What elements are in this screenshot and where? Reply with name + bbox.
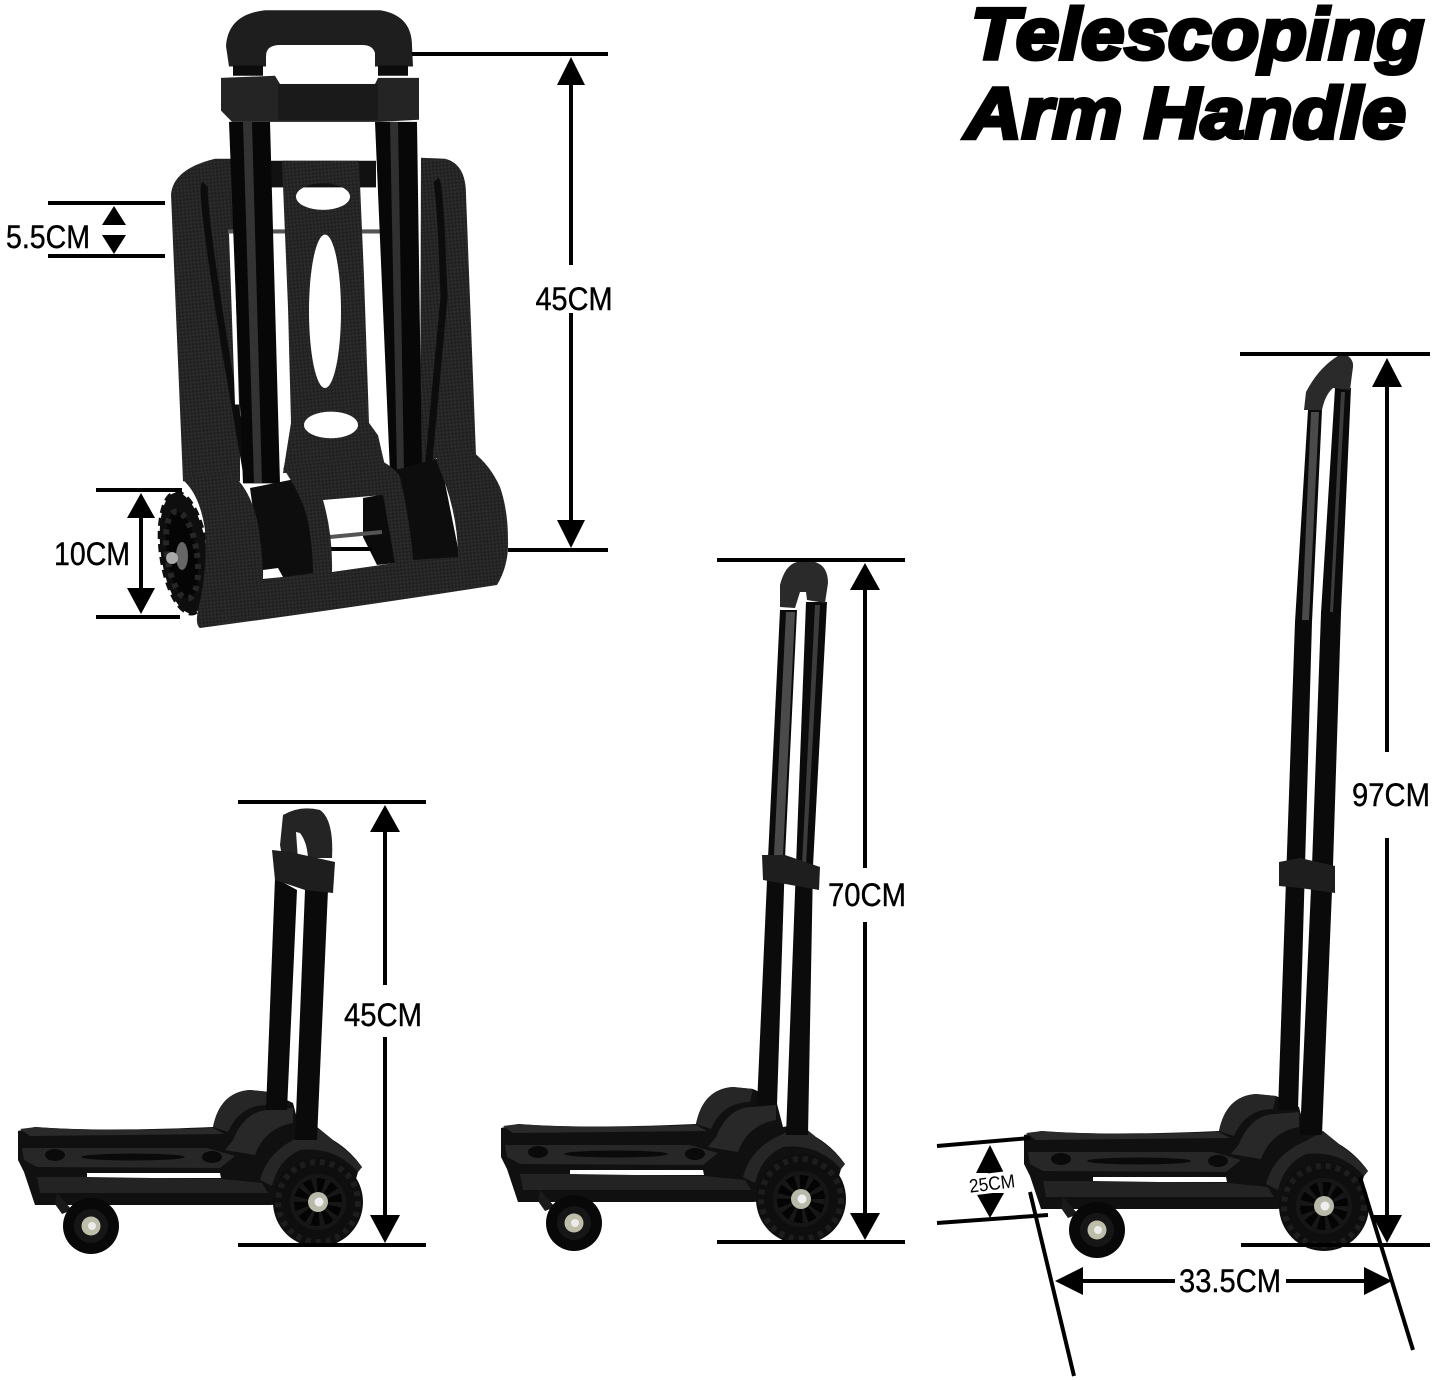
dimension: wheel diameter 10CM [54, 490, 182, 617]
title: Telescoping Arm Handle: Arm Handle [963, 74, 1406, 154]
base and wheels [501, 1087, 846, 1251]
folded trolley: top cross bar [268, 161, 376, 187]
folded trolley: right pole [375, 122, 422, 473]
dimension: 97CM: 97CM [1352, 777, 1430, 813]
clamp [272, 850, 335, 893]
folded trolley: roller body [183, 451, 508, 628]
trolley: 70CM extended [501, 562, 846, 1251]
dimension: 45CM: 45CM [344, 997, 422, 1033]
dimension: folded height 45CM: 45CM [536, 281, 612, 317]
folded trolley: central spine with cut-outs [282, 161, 385, 473]
clamp [762, 855, 820, 890]
base and wheels [18, 1090, 363, 1254]
folded trolley: wheel [153, 489, 215, 617]
poles [266, 878, 328, 1140]
folded trolley: small white gap [263, 568, 283, 579]
dimension: 45CM [238, 802, 426, 1245]
handle [780, 562, 828, 608]
base and wheels [1024, 1094, 1369, 1258]
dimension: wheel width 5.5CM [6, 203, 165, 256]
folded trolley photo [153, 10, 508, 628]
poles [1278, 388, 1351, 1135]
folded trolley: elastic straps [204, 180, 444, 481]
clamp [1279, 858, 1335, 893]
dimension: 25CM deck width [937, 1138, 1048, 1223]
folded trolley: window interior [320, 494, 398, 574]
handle [1304, 353, 1353, 410]
folded trolley: clamp [221, 76, 419, 122]
folded trolley: left sliver gap [229, 233, 239, 404]
folded trolley: back plate [171, 158, 476, 481]
folded trolley: upper frame [171, 10, 476, 483]
folded trolley: recesses behind rollers [250, 458, 460, 582]
folded trolley: handle [226, 10, 413, 67]
dimension: folded height 45CM [412, 54, 612, 550]
dimension: 70CM [717, 560, 906, 1242]
dimension: wheel width 5.5CM: 5.5CM [6, 219, 90, 255]
handle [280, 808, 332, 860]
dimension: 97CM [1240, 354, 1430, 1245]
dimension: 25CM deck width: 25CM [968, 1171, 1016, 1198]
trolley: 45CM extended [18, 808, 363, 1254]
title: Telescoping Arm Handle [963, 0, 1424, 154]
dimension: wheel diameter 10CM: 10CM [54, 536, 130, 572]
folded trolley: axle rod [228, 229, 385, 233]
dimension: 33.5CM deck length [1030, 1177, 1413, 1376]
poles [757, 602, 827, 1135]
folded trolley: left pole [229, 122, 280, 483]
dimension: 33.5CM deck length: 33.5CM [1179, 1263, 1281, 1299]
dimension: 70CM: 70CM [828, 877, 906, 913]
trolley: 97CM extended [1024, 353, 1369, 1258]
